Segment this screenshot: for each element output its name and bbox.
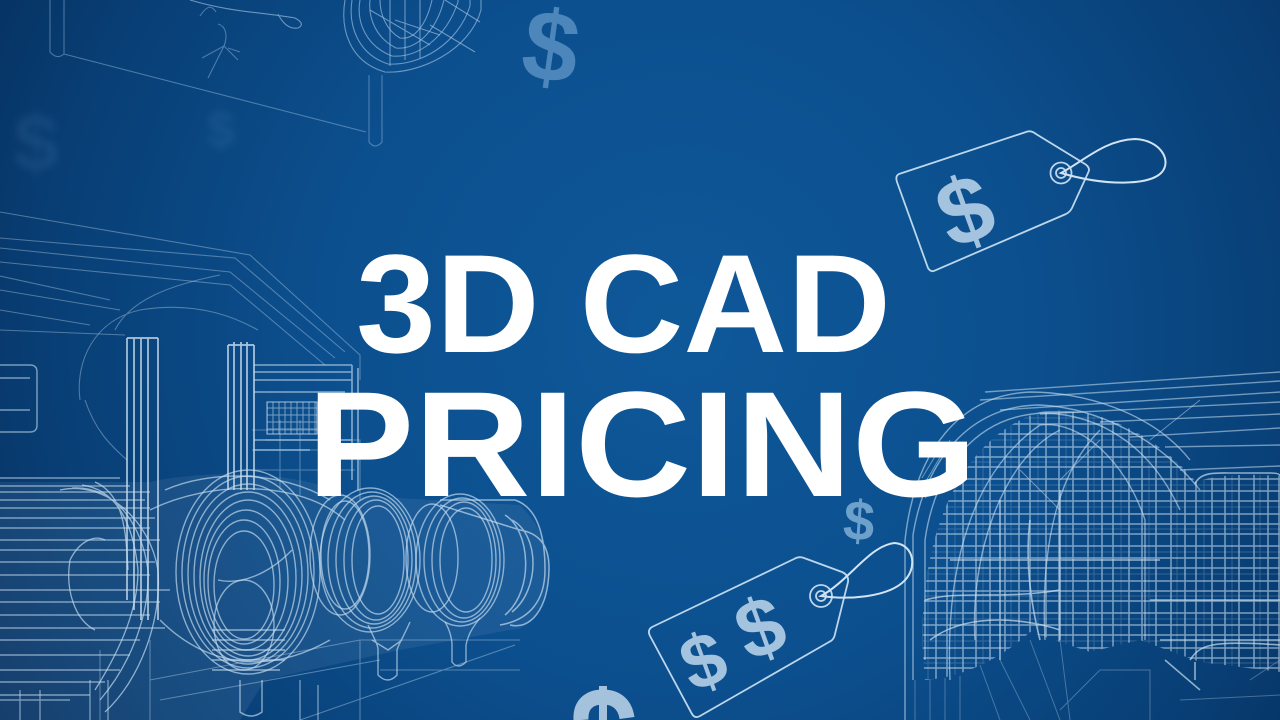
icon: dollar bottom cropped	[581, 686, 627, 720]
ring cluster 4	[406, 494, 504, 666]
smudged background dollars	[14, 98, 235, 187]
wireframe: top-left machine	[50, 0, 481, 146]
smudged background dollars: $	[14, 98, 58, 187]
title	[307, 225, 977, 528]
dollar: $	[923, 152, 1008, 269]
machine glow	[0, 474, 549, 720]
end cap	[440, 500, 549, 626]
price tag: bottom: $	[724, 578, 798, 679]
ring cluster 3	[310, 488, 420, 680]
ring cluster 2	[150, 470, 345, 716]
lower faint lines	[915, 640, 1280, 720]
dome contours	[905, 392, 1200, 720]
base frame	[100, 640, 520, 720]
string	[1061, 139, 1166, 183]
icon: dollar small: $	[841, 488, 877, 553]
housing	[0, 212, 360, 500]
pillars	[127, 338, 254, 620]
cylinder bands	[0, 478, 170, 695]
wireframe: right machine	[905, 372, 1280, 720]
faint dollar signs	[516, 0, 877, 553]
grid fill	[923, 411, 1280, 680]
price tag: top right	[896, 131, 1166, 271]
eyelet	[1050, 162, 1072, 184]
hatch diagonals	[918, 400, 1200, 510]
string	[821, 543, 912, 598]
title: PRICING	[307, 360, 977, 528]
window	[0, 365, 37, 432]
top lines	[980, 372, 1280, 470]
dollars: $	[669, 614, 738, 709]
wireframe: left machine	[0, 212, 549, 720]
smudged background dollars: $	[207, 102, 235, 158]
bracket	[254, 365, 358, 490]
price tag: bottom	[649, 543, 912, 717]
title: 3D CAD	[356, 225, 891, 382]
eyelet	[810, 585, 832, 607]
